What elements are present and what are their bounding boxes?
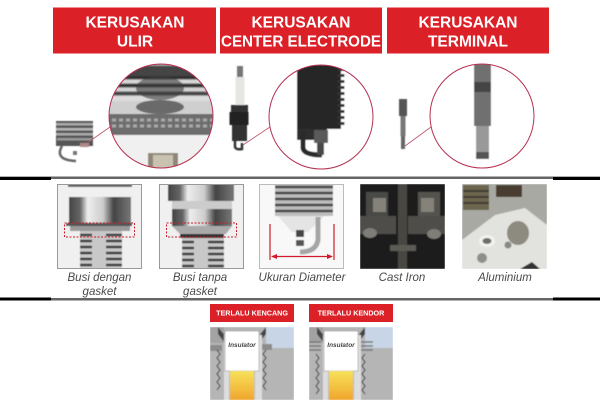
- caption: busi dengan gasket: gasket: [83, 286, 117, 298]
- diagram: terlalu kendor: [309, 327, 393, 400]
- header: kerusakan terminal: [387, 8, 549, 54]
- caption: busi tanpa gasket: [173, 272, 227, 298]
- photo: aluminium: [462, 184, 547, 269]
- photo: cast iron: [360, 184, 445, 269]
- header: kerusakan ulir: KERUSAKAN: [85, 14, 185, 32]
- header: kerusakan terminal: KERUSAKAN: [418, 14, 518, 32]
- caption: busi tanpa gasket: Busi tanpa: [173, 272, 227, 284]
- label: terlalu kendor: [309, 304, 393, 322]
- header: kerusakan center electrode: KERUSAKAN: [251, 14, 351, 32]
- diagram: terlalu kendor: Insulator: [327, 342, 355, 349]
- leader line: electrode: [243, 127, 270, 145]
- divider bar top: [0, 176, 600, 180]
- caption: busi tanpa gasket: gasket: [183, 286, 218, 298]
- divider bar bottom: [0, 298, 600, 300]
- diagram: terlalu kencang: Insulator: [228, 342, 256, 349]
- header: kerusakan center electrode: CENTER ELECTRODE: [221, 34, 381, 50]
- icon: spark plug thread damage: [56, 121, 93, 161]
- diagram: terlalu kencang: [210, 327, 294, 400]
- icon: whole spark plug: [230, 66, 248, 149]
- photo: busi tanpa gasket: [159, 184, 244, 269]
- label: terlalu kendor: TERLALU KENDOR: [318, 308, 385, 318]
- photo: busi dengan gasket: [57, 184, 142, 269]
- header: kerusakan ulir: [53, 8, 216, 54]
- leader line: thread: [87, 127, 110, 143]
- magnified circle: center electrode: [269, 65, 373, 169]
- caption: busi dengan gasket: Busi dengan: [68, 272, 131, 284]
- photo: ukuran diameter: [259, 184, 344, 269]
- magnified circle: damaged thread: [109, 64, 213, 168]
- label: terlalu kencang: [210, 304, 294, 322]
- icon: terminal: [399, 99, 407, 149]
- caption: busi dengan gasket: [68, 272, 131, 298]
- caption: ukuran diameter: Ukuran Diameter: [259, 272, 347, 284]
- magnified circle: terminal: [430, 64, 534, 168]
- header: kerusakan ulir: ULIR: [117, 34, 153, 50]
- caption: aluminium: Aluminium: [477, 272, 532, 284]
- leader line: terminal: [405, 127, 431, 146]
- label: terlalu kencang: TERLALU KENCANG: [216, 308, 288, 318]
- caption: cast iron: Cast Iron: [379, 272, 425, 284]
- header: kerusakan center electrode: [220, 8, 382, 54]
- header: kerusakan terminal: TERMINAL: [428, 34, 508, 50]
